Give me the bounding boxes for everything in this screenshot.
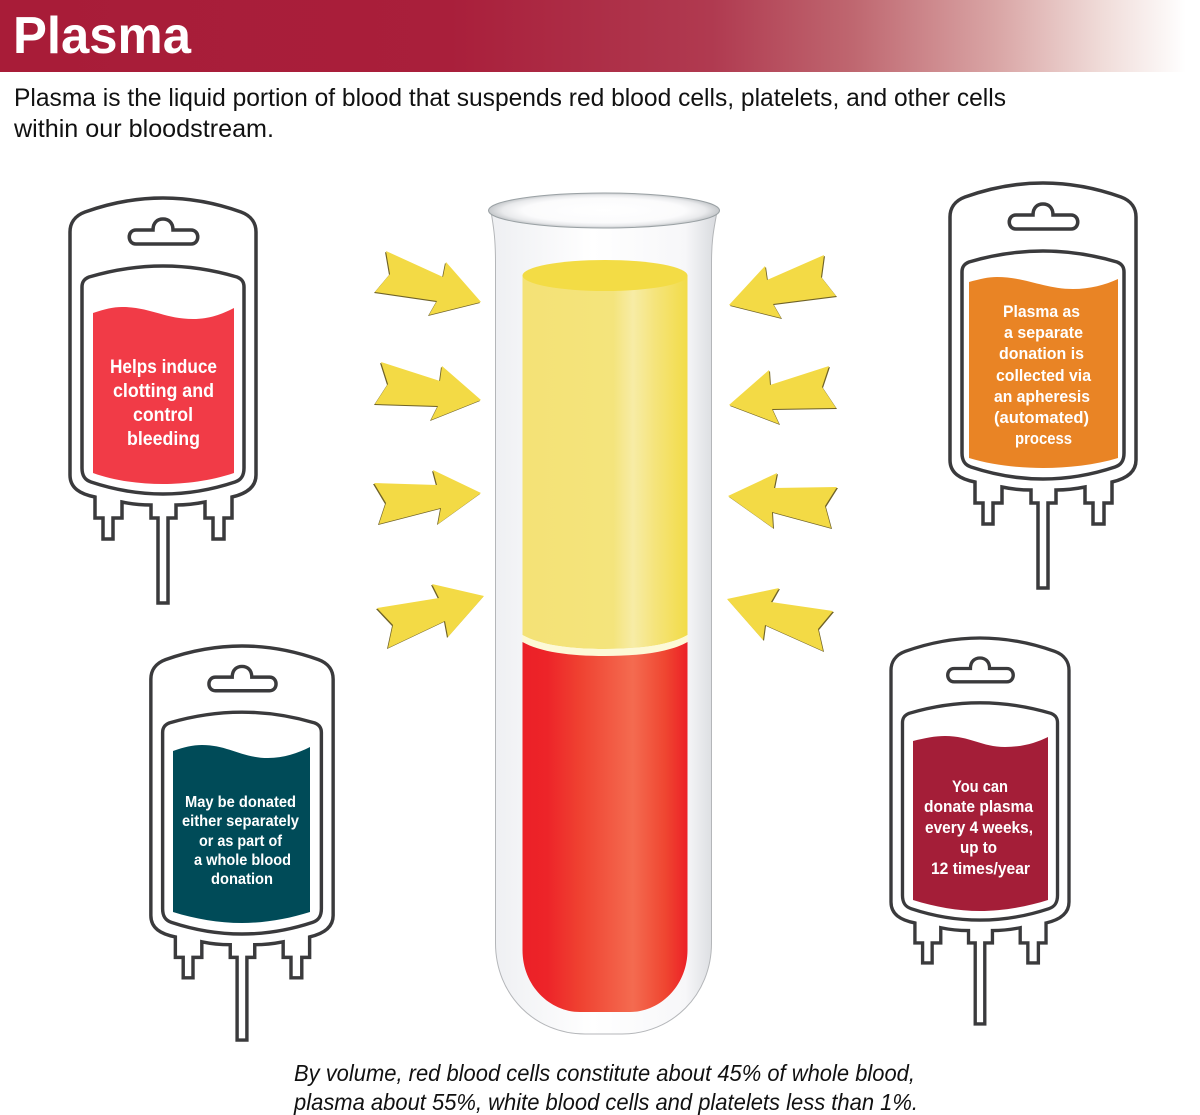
arrow: right 3 xyxy=(728,473,838,529)
bag text: You can xyxy=(952,778,1008,796)
bag outline xyxy=(151,646,333,1040)
bag text: every 4 weeks, xyxy=(925,819,1033,837)
blood bag: donation frequency xyxy=(891,638,1069,1024)
bag text: collected via xyxy=(996,366,1091,385)
red blood cells layer xyxy=(522,642,688,1012)
bag text: bleeding xyxy=(127,428,200,450)
bag text xyxy=(110,356,217,450)
test tube xyxy=(488,193,720,1034)
bag text xyxy=(994,302,1091,448)
footnote: By volume, red blood cells constitute about 45% of whole blood, xyxy=(294,1060,915,1086)
bag fill xyxy=(913,736,1048,911)
plasma surface xyxy=(522,260,688,291)
bag text: donate plasma xyxy=(924,798,1034,816)
bag fill xyxy=(969,277,1118,468)
bag text: donation is xyxy=(999,344,1084,363)
arrow: left 3 xyxy=(373,470,481,525)
header banner xyxy=(0,0,1200,72)
bag outline xyxy=(70,198,256,603)
bag text: or as part of xyxy=(199,833,283,850)
bag text: Helps induce xyxy=(110,356,217,378)
buffy coat band xyxy=(522,635,688,656)
arrow: left 4 xyxy=(376,584,484,649)
intro text xyxy=(13,84,1006,143)
bag text: donation xyxy=(211,871,273,888)
bag text: an apheresis xyxy=(994,387,1090,406)
intro text: within our bloodstream. xyxy=(13,115,274,143)
bag fill xyxy=(93,307,234,484)
intro text: Plasma is the liquid portion of blood that suspends red blood cells, platelets, and other cells xyxy=(14,84,1006,112)
glass body xyxy=(491,211,717,1034)
bag fill xyxy=(173,745,310,923)
arrow: right 1 xyxy=(729,255,837,319)
bag text xyxy=(182,794,299,888)
bag text: either separately xyxy=(182,813,299,830)
bag outline xyxy=(891,638,1069,1024)
bag text: a whole blood xyxy=(194,852,291,869)
footnote xyxy=(293,1060,918,1115)
tube rim xyxy=(488,193,720,228)
footnote: plasma about 55%, white blood cells and platelets less than 1%. xyxy=(293,1089,918,1115)
bag text: May be donated xyxy=(185,794,296,811)
plasma layer xyxy=(522,275,688,649)
bag text: up to xyxy=(960,839,997,857)
bag text: 12 times/year xyxy=(931,860,1031,878)
bag text: control xyxy=(133,404,193,426)
bag text: process xyxy=(1015,429,1072,448)
arrow: right 4 xyxy=(727,588,834,652)
bag outline xyxy=(950,183,1136,588)
arrow: right 2 xyxy=(729,366,837,425)
blood bag: apheresis donation xyxy=(950,183,1136,588)
blood bag: donation options xyxy=(151,646,333,1040)
bag text: a separate xyxy=(1004,323,1083,342)
arrow: left 1 xyxy=(374,251,481,316)
bag text: Plasma as xyxy=(1003,302,1080,321)
arrow: left 2 xyxy=(374,362,481,421)
blood bag: helps induce clotting xyxy=(70,198,256,603)
title: Plasma xyxy=(13,7,192,65)
bag text xyxy=(924,778,1034,878)
bag text: clotting and xyxy=(113,380,214,402)
bag text: (automated) xyxy=(994,408,1089,427)
